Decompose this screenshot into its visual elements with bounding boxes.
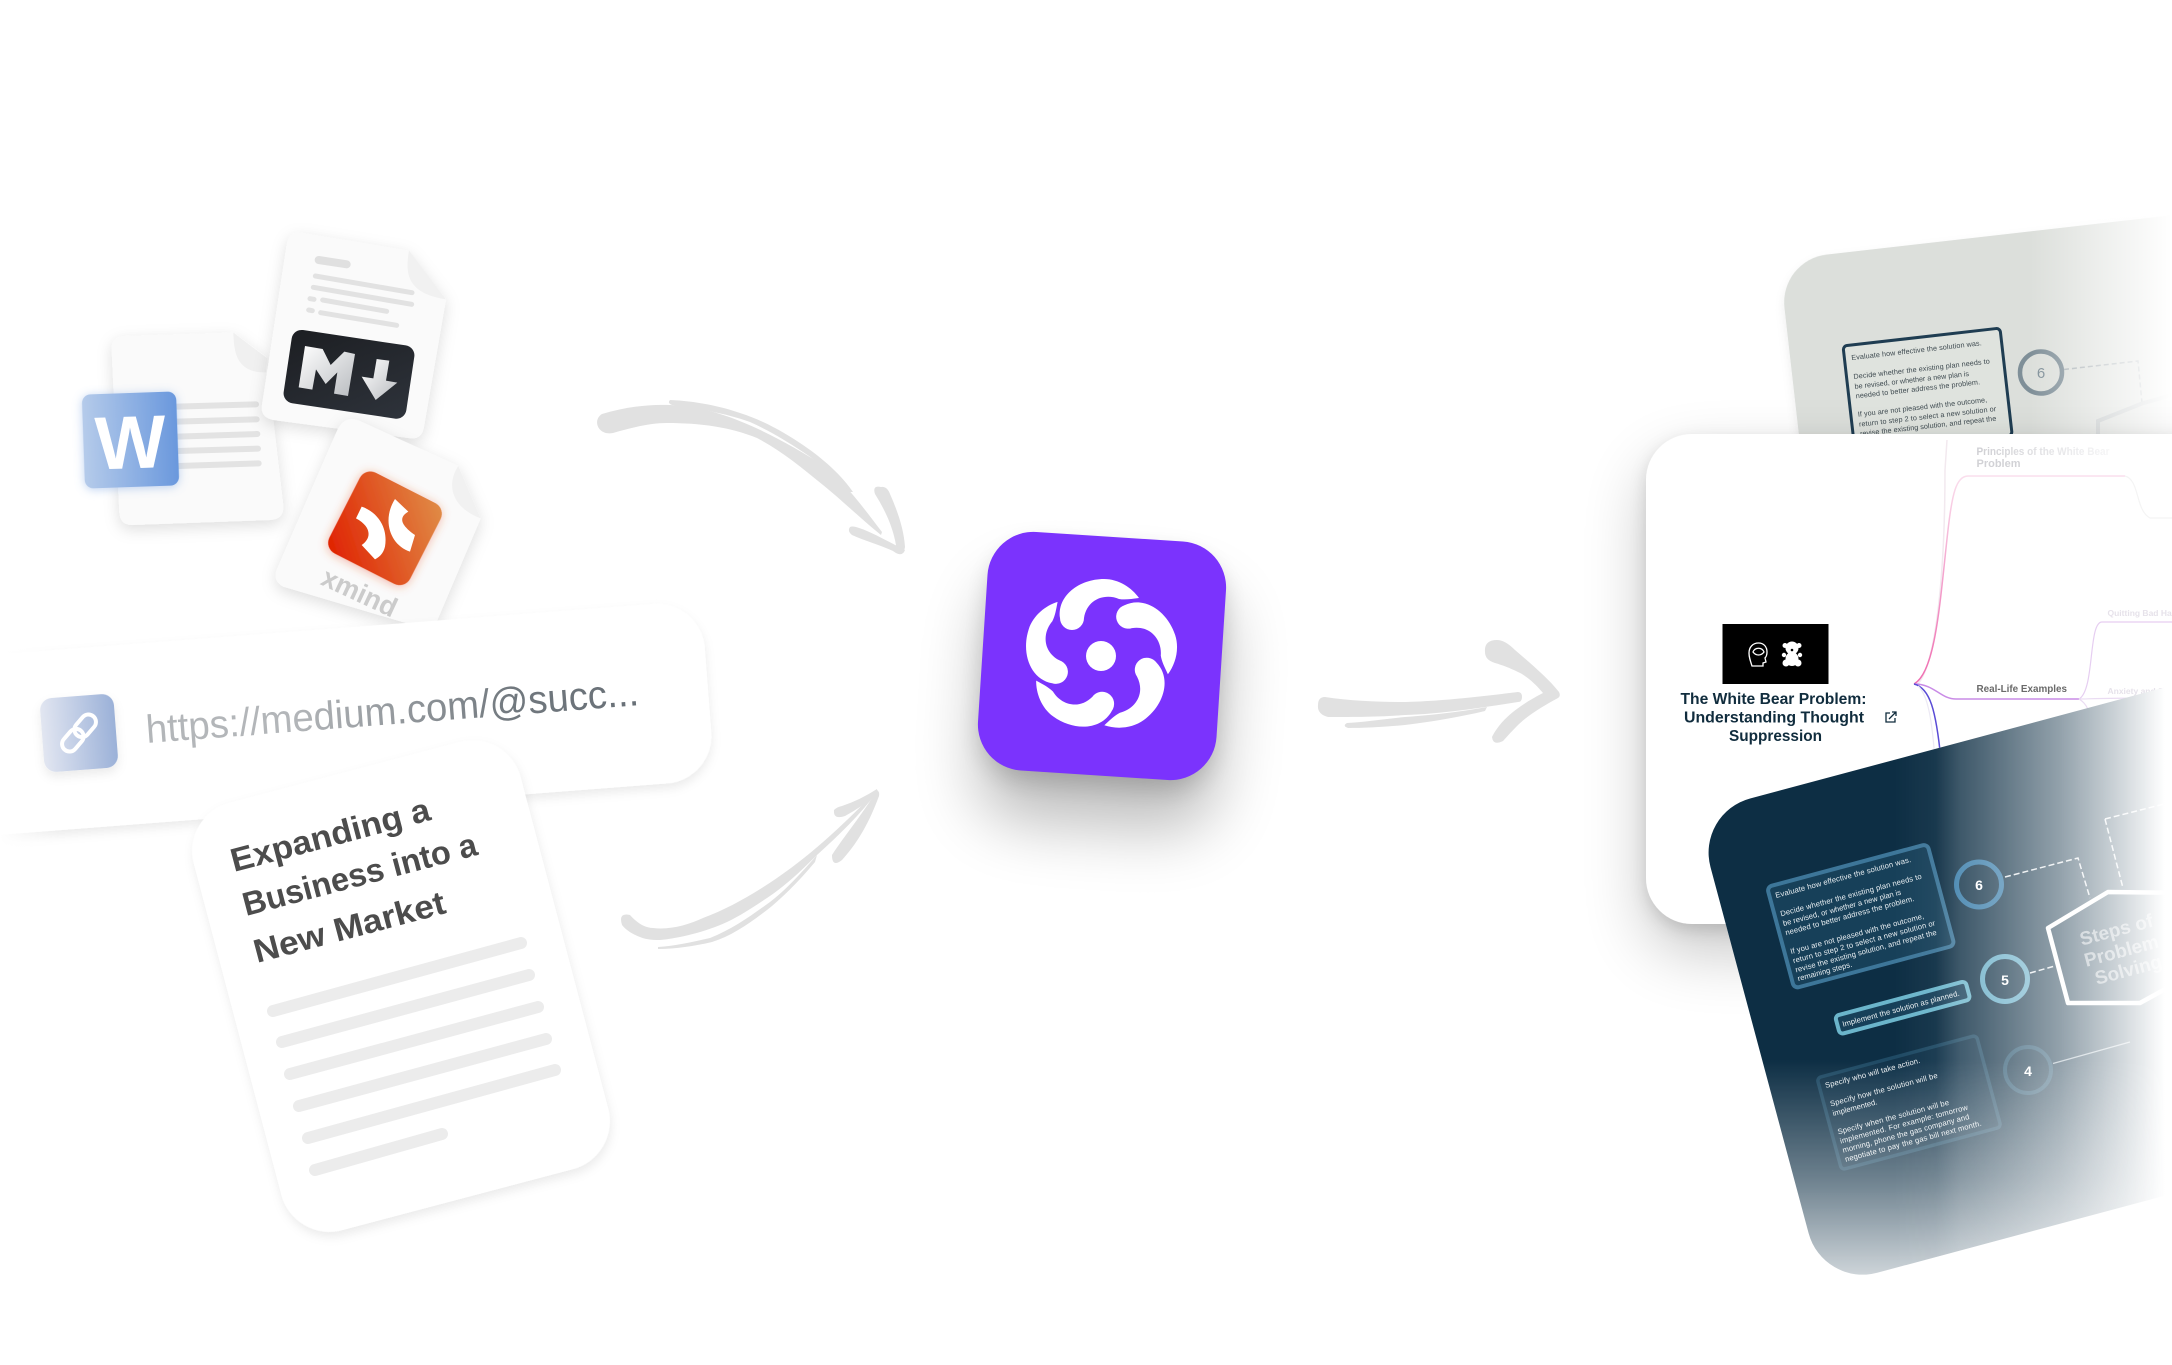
step 4 text box: Specify how the solution will be	[1829, 1071, 1939, 1108]
step 5 text box: Implement the solution as planned.	[1841, 989, 1960, 1029]
step 6 text box: return to step 2 to select a new solution or	[1858, 404, 1997, 429]
xmind wordmark: xmind	[317, 561, 402, 623]
map title: Suppression	[1729, 728, 1822, 745]
step 6 text box	[1767, 844, 1955, 988]
panel: light mind map (back)	[1784, 219, 2153, 434]
step 6 badge: 6	[1975, 877, 1983, 893]
central hexagon: Steps of Problem Solving: Problem	[2082, 932, 2161, 972]
step 6 text box: be revised, or whether a new plan is	[1782, 888, 1902, 928]
step 5 text box	[1835, 981, 1970, 1034]
step 4 text box	[1817, 1035, 2001, 1170]
step 6 text box: If you are not pleased with the outcome,	[1857, 395, 1987, 419]
arrow: top input	[597, 400, 905, 554]
step 6 text box: needed to better address the problem.	[1855, 377, 1980, 400]
map connectors	[1914, 440, 2172, 760]
step 4 text box: implemented.	[1832, 1097, 1878, 1118]
step 4 badge	[2005, 1047, 2051, 1093]
map title: The White Bear Problem:	[1680, 691, 1866, 708]
URL input card	[0, 600, 715, 850]
step 4 text box: negotiate to pay the gas bill next month.	[1844, 1119, 1982, 1164]
icon: teddy bear	[1782, 642, 1802, 666]
step 6 text box	[1842, 327, 2014, 434]
central hexagon: Steps of Problem Solving: Solving	[2093, 952, 2164, 990]
article body lines	[273, 943, 555, 1170]
step 6 text box: remaining steps.	[1797, 960, 1853, 983]
article title	[226, 790, 481, 970]
icon: Word W	[82, 391, 179, 489]
step 6 badge	[1956, 862, 2002, 907]
icon: Xmind logo	[324, 467, 446, 589]
step 6 text box: Decide whether the existing plan needs to	[1779, 872, 1923, 918]
article title: Expanding a	[226, 790, 435, 879]
step 6 text box: If you are not pleased with the outcome,	[1789, 912, 1925, 956]
icon: head with brain	[1749, 643, 1767, 666]
step 5 badge: 5	[2001, 972, 2009, 988]
article title: Business into a	[238, 825, 481, 923]
icon: pinwheel logo	[1015, 579, 1186, 743]
icon: Word W: W	[94, 399, 167, 486]
step 4 text box: Specify when the solution will be	[1837, 1098, 1950, 1136]
step 6 text box: remaining steps.	[1860, 432, 1914, 447]
step 4 text box: Specify who will take action.	[1824, 1056, 1921, 1090]
step 5 badge	[1982, 956, 2028, 1002]
Xmind document	[276, 419, 481, 627]
Markdown document	[262, 232, 446, 438]
map title	[1680, 691, 1866, 745]
step 6 text box: be revised, or whether a new plan is	[1854, 369, 1970, 391]
panel: white mind map (middle)	[1646, 434, 2172, 952]
step 6 badge: 6	[2037, 365, 2045, 382]
step 6 text box: Decide whether the existing plan needs to	[1853, 357, 1990, 381]
branch labels	[1976, 446, 2172, 696]
step 6 text box: needed to better address the problem.	[1784, 894, 1915, 937]
arrow: output	[1318, 640, 1560, 743]
thumbnail: brain and bear	[1722, 624, 1828, 684]
panel: dark mind map (front)	[1708, 690, 2158, 1275]
arrow: bottom input	[621, 789, 879, 949]
branch labels: Problem	[1976, 458, 2021, 470]
icon: link	[39, 693, 119, 773]
central hexagon	[2096, 408, 2128, 434]
app logo tile	[975, 529, 1229, 833]
URL text: https://medium.com/@succ...	[144, 670, 640, 752]
step 6 text box: Evaluate how effective the solution was.	[1851, 338, 1982, 362]
step 6 text box: return to step 2 to select a new solution or	[1792, 918, 1937, 965]
step 6 text box: Evaluate how effective the solution was.	[1774, 855, 1912, 900]
map title: Understanding Thought	[1684, 710, 1864, 726]
icon: Markdown M-down	[282, 329, 416, 420]
step 6 badge	[2020, 352, 2062, 394]
step 4 badge: 4	[2024, 1063, 2032, 1079]
article card	[181, 729, 621, 1243]
white backing of dark card	[1696, 632, 2172, 1287]
file icons cluster	[82, 232, 481, 627]
icon: external link	[1886, 712, 1896, 722]
branch labels: Principles of the White Bear	[1976, 446, 2110, 458]
central hexagon: Steps of Problem Solving: Steps of	[2078, 911, 2156, 951]
article title: New Market	[249, 884, 449, 970]
step 6 text box: revise the existing solution, and repeat the	[1794, 928, 1938, 974]
Word document	[82, 333, 283, 525]
step 4 text box: morning, phone the gas company and	[1841, 1112, 1970, 1155]
step 6 text box: revise the existing solution, and repeat the	[1860, 414, 1997, 438]
step 4 text box: implemented. For example: tomorrow	[1839, 1103, 1969, 1146]
central hexagon: Steps of Problem Solving	[2048, 892, 2172, 1003]
branch labels: Real-Life Examples	[1976, 683, 2067, 695]
